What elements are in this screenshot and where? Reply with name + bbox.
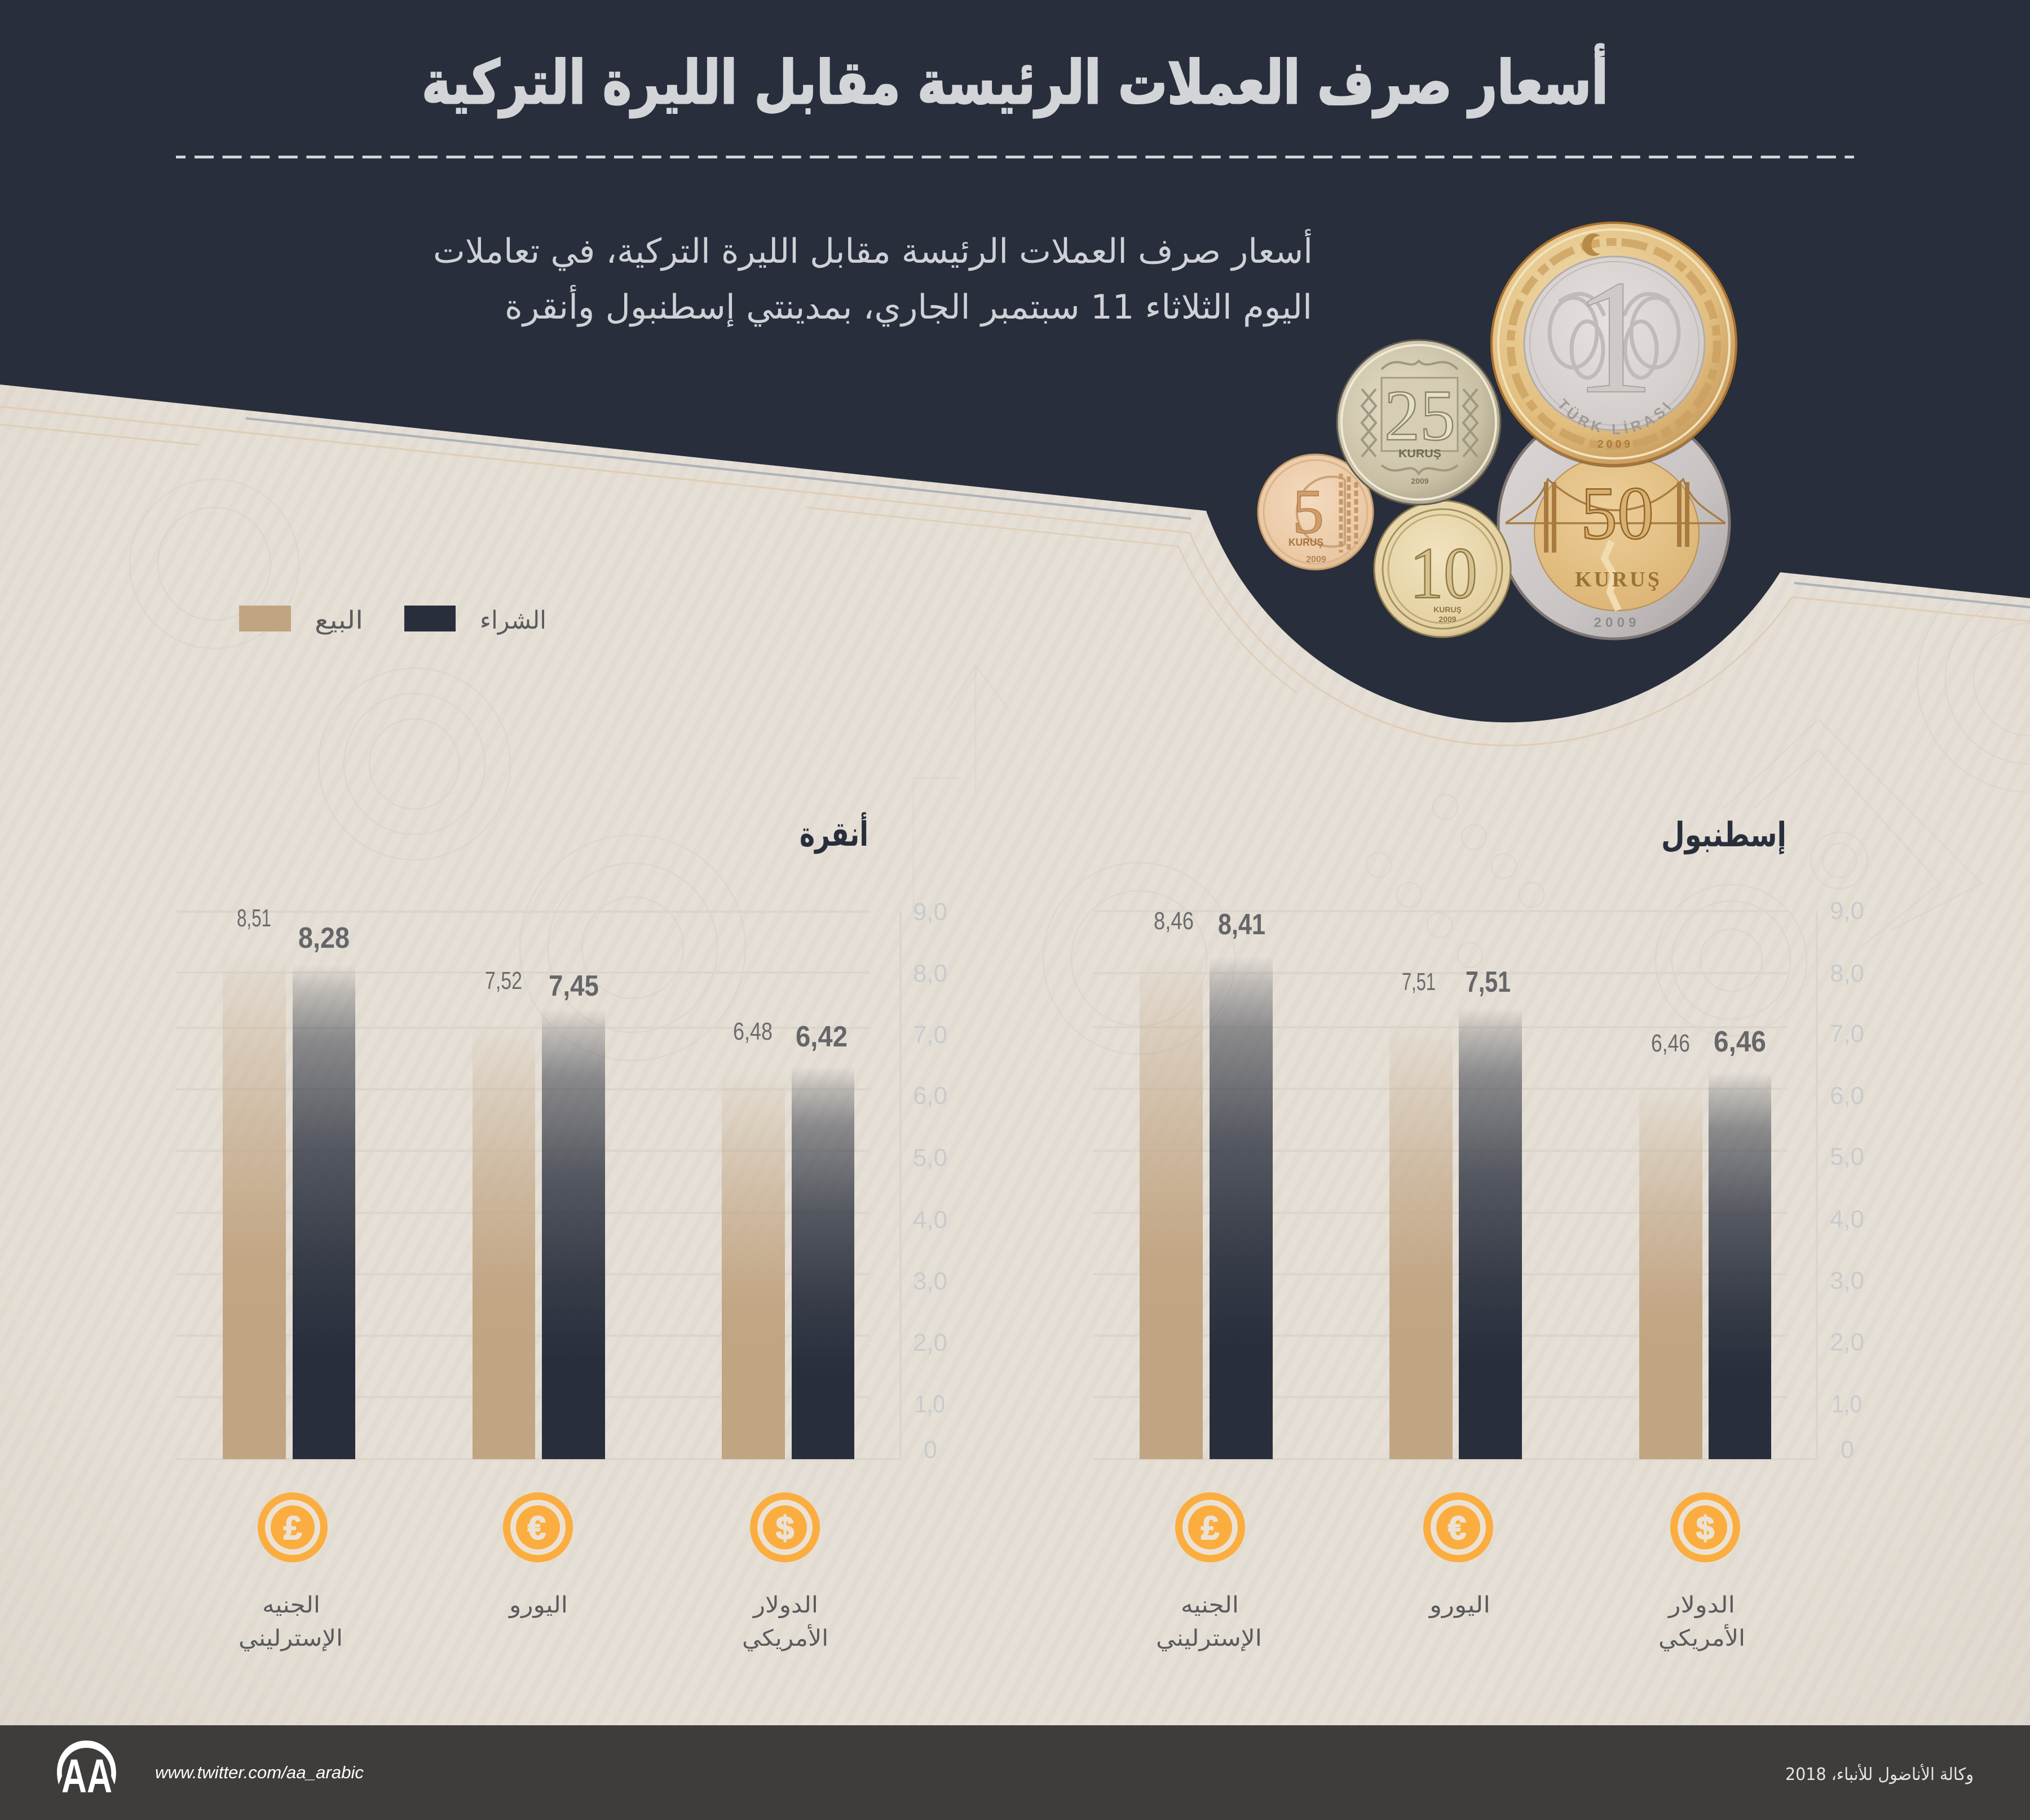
legend: buy <box>404 606 546 635</box>
coin: 1 lira: 2009 <box>1597 439 1630 450</box>
bars: dollar: 6,48 <box>733 1018 773 1045</box>
axis labels: 3,0 <box>913 1267 947 1295</box>
coin: 10 kurus: 10 <box>1410 533 1477 614</box>
coins illustration <box>1257 222 1737 640</box>
axis labels <box>913 898 947 1464</box>
coin: 10 kurus <box>1374 501 1511 637</box>
axis labels: 0 <box>924 1436 937 1464</box>
coin: 5 kurus <box>1258 454 1373 569</box>
icon: dollar Ankara: $ <box>776 1510 794 1547</box>
axis labels: 6,0 <box>913 1082 947 1110</box>
bars: pound: 8,46 <box>1154 907 1194 935</box>
currency labels Ankara: الدولار <box>752 1592 818 1618</box>
coin: 25 kurus <box>1337 340 1501 505</box>
bars: euro: 7,45 <box>549 970 599 1002</box>
bars: dollar: 6,46 <box>1651 1030 1690 1057</box>
bars: euro: 7,51 <box>1402 968 1436 996</box>
coin: 25 kurus: KURUŞ <box>1398 448 1441 460</box>
currency labels Istanbul: الدولار <box>1667 1592 1735 1618</box>
axis labels: 5,0 <box>913 1144 947 1172</box>
currency labels Ankara: الجنيه <box>262 1592 320 1618</box>
axis labels: 0 <box>1841 1436 1854 1464</box>
coin: 50 kurus <box>1498 408 1729 639</box>
dashed divider <box>176 156 1854 158</box>
axis labels: 1,0 <box>1832 1390 1862 1418</box>
icon: pound Istanbul: £ <box>1201 1510 1219 1547</box>
icon: pound Ankara: £ <box>284 1510 302 1547</box>
coin: 10 kurus: 2009 <box>1438 615 1457 624</box>
axis labels: 5,0 <box>1830 1143 1864 1170</box>
chart: Istanbul <box>1093 897 1864 1464</box>
bars: pound: 8,28 <box>298 922 350 955</box>
currency labels Istanbul: الجنيه <box>1181 1592 1239 1618</box>
axis labels: 8,0 <box>913 960 947 987</box>
coin: 5 kurus: 5 <box>1292 477 1324 547</box>
axis labels: 6,0 <box>1830 1082 1864 1110</box>
icon: dollar Istanbul: $ <box>1696 1510 1714 1547</box>
legend: buy: الشراء <box>480 606 546 635</box>
header dark panel <box>0 0 2030 722</box>
axis labels: 4,0 <box>1830 1205 1864 1233</box>
currency labels Istanbul <box>1156 1592 1745 1651</box>
heading: Ankara: أنقرة <box>800 812 868 854</box>
heading: Istanbul: إسطنبول <box>1661 815 1786 855</box>
chart: Ankara <box>176 898 947 1464</box>
coin: 25 kurus: 2009 <box>1411 476 1429 485</box>
axis labels: 2,0 <box>913 1329 947 1357</box>
axis labels: 2,0 <box>1830 1328 1864 1356</box>
coin: 1 lira <box>1490 222 1737 467</box>
agency credit: وكالة الأناضول للأنباء، 2018 <box>1785 1763 1974 1784</box>
icon: euro Ankara <box>503 1492 573 1562</box>
bars: pound: 8,51 <box>237 904 271 932</box>
icon: euro Istanbul: € <box>1448 1510 1466 1547</box>
bars: euro: 7,52 <box>485 967 522 995</box>
icon: pound Istanbul <box>1175 1492 1245 1562</box>
currency labels Ankara: الأمريكي <box>742 1624 828 1651</box>
bars: dollar: 6,42 <box>796 1021 848 1053</box>
bars: pound <box>223 904 355 1459</box>
legend <box>239 606 546 635</box>
axis labels: 8,0 <box>1830 960 1864 987</box>
axis labels: 7,0 <box>913 1021 947 1049</box>
twitter url: www.twitter.com/aa_arabic <box>155 1762 364 1782</box>
axis labels: 1,0 <box>915 1390 945 1418</box>
title: أسعار صرف العملات الرئيسة مقابل الليرة التركية <box>422 44 1608 118</box>
icon: dollar Istanbul <box>1670 1492 1740 1562</box>
currency labels Istanbul: الإسترليني <box>1156 1625 1262 1651</box>
footer bar <box>0 1725 2030 1820</box>
coin: 50 kurus: 50 <box>1581 471 1654 555</box>
coin: 25 kurus: 25 <box>1384 376 1455 456</box>
axis labels <box>1830 897 1864 1464</box>
currency labels Ankara <box>239 1592 828 1651</box>
currency labels Istanbul: الأمريكي <box>1658 1624 1745 1651</box>
coin: 5 kurus: 2009 <box>1306 555 1326 564</box>
icon: AA logo <box>57 1741 116 1803</box>
coin: 5 kurus: KURUŞ <box>1288 537 1323 548</box>
axis labels: 9,0 <box>913 898 947 926</box>
bars: dollar: 6,46 <box>1714 1026 1766 1058</box>
icon: pound Ankara <box>258 1492 328 1562</box>
bars: dollar <box>1639 1026 1771 1459</box>
legend: sell: البيع <box>315 606 363 635</box>
currency labels Ankara: اليورو <box>508 1592 568 1618</box>
intro paragraph <box>433 229 1313 327</box>
icon: euro Istanbul <box>1423 1492 1493 1562</box>
bars: pound <box>1140 907 1273 1459</box>
coin: 50 kurus: KURUŞ <box>1575 568 1660 591</box>
decorative border lines <box>0 407 2030 745</box>
axis labels: 4,0 <box>913 1206 947 1234</box>
legend: sell <box>239 606 363 635</box>
bars: euro <box>1389 966 1522 1459</box>
intro paragraph: اليوم الثلاثاء 11 سبتمبر الجاري، بمدينتي إسطنبول وأنقرة <box>505 285 1312 327</box>
icon: euro Ankara: € <box>528 1510 546 1547</box>
bars: euro: 7,51 <box>1466 966 1511 999</box>
axis labels: 3,0 <box>1830 1267 1864 1295</box>
coin: 50 kurus: 2009 <box>1594 615 1636 630</box>
coin: 1 lira: 1 <box>1573 246 1654 427</box>
axis labels: 9,0 <box>1830 897 1864 925</box>
coin: 1 lira: TÜRK LİRASI <box>1559 398 1671 434</box>
intro paragraph: أسعار صرف العملات الرئيسة مقابل الليرة التركية، في تعاملات <box>433 229 1313 271</box>
bars: pound: 8,41 <box>1218 908 1265 941</box>
axis labels: 7,0 <box>1830 1020 1864 1048</box>
currency labels Istanbul: اليورو <box>1428 1592 1490 1618</box>
currency labels Ankara: الإسترليني <box>239 1625 343 1651</box>
icon: AA logo: AA <box>61 1750 112 1803</box>
coin: 10 kurus: KURUŞ <box>1433 605 1462 614</box>
bars: euro <box>473 967 605 1459</box>
icon: dollar Ankara <box>750 1492 820 1562</box>
bars: dollar <box>722 1018 854 1459</box>
